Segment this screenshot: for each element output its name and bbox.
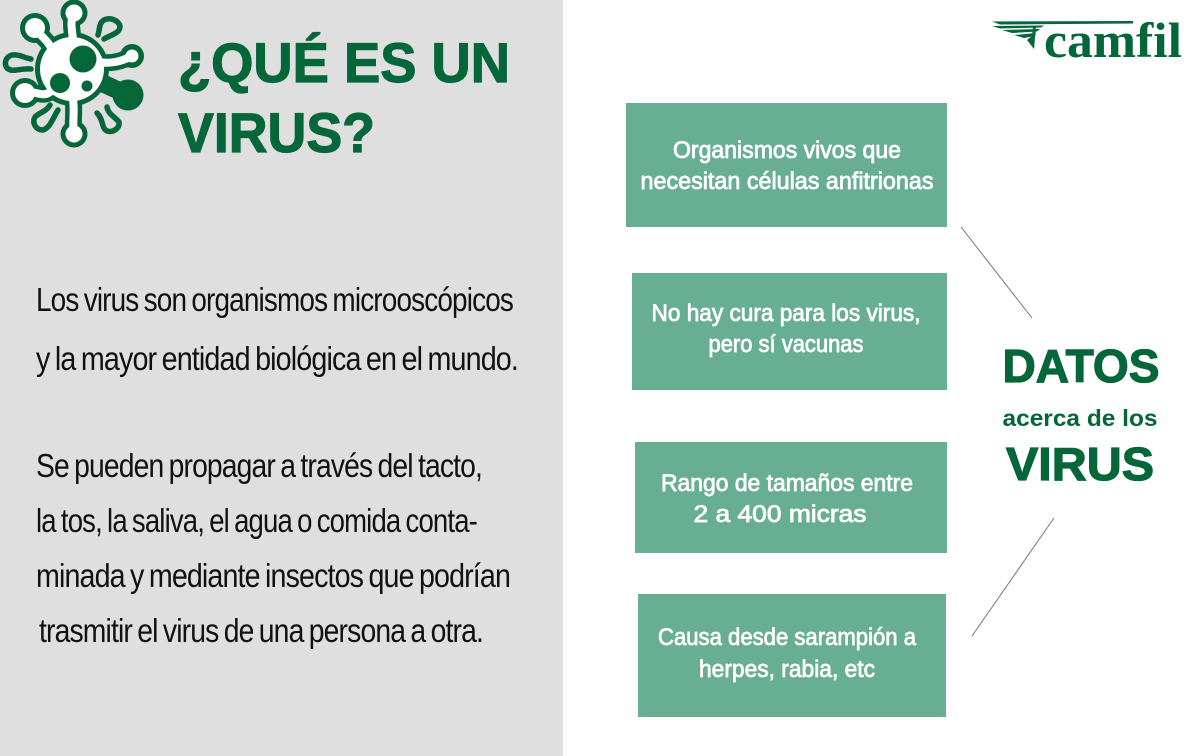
fact box 2: No hay cura para los virus, xyxy=(652,300,920,327)
fact box 2: pero sí vacunas xyxy=(708,331,864,358)
paragraph: what viruses are: y la mayor entidad biológica en el mundo. xyxy=(36,340,518,377)
paragraph: how viruses spread: Se pueden propagar a través del tacto, xyxy=(36,447,482,484)
side heading: datos acerca de los virus: DATOS xyxy=(1002,340,1160,392)
side heading: datos acerca de los virus: acerca de los xyxy=(1002,405,1158,431)
paragraph: how viruses spread: minada y mediante insectos que podrían xyxy=(36,557,510,594)
icon: logo wing xyxy=(992,21,1133,49)
logo: camfil xyxy=(992,12,1182,68)
paragraph: how viruses spread xyxy=(36,447,510,649)
title xyxy=(178,31,510,164)
side heading: datos acerca de los virus: VIRUS xyxy=(1006,438,1154,490)
connector line: upper xyxy=(961,227,1032,318)
title: ¿QUÉ ES UN xyxy=(178,31,510,94)
fact box 1: Organismos vivos que xyxy=(673,137,901,164)
paragraph: how viruses spread: la tos, la saliva, el agua o comida conta- xyxy=(36,502,477,539)
fact box 4: Causa desde sarampión a xyxy=(658,624,917,651)
title: VIRUS? xyxy=(178,101,375,164)
fact box 2 xyxy=(632,273,947,390)
icon: virus xyxy=(5,0,144,148)
fact box 4 xyxy=(638,594,946,717)
fact box 3 xyxy=(635,442,947,553)
connector line: lower xyxy=(972,518,1054,636)
fact box 3: 2 a 400 micras xyxy=(694,501,866,528)
fact box 1: necesitan células anfitrionas xyxy=(640,168,934,195)
left panel background xyxy=(0,0,563,756)
paragraph: what viruses are: Los virus son organismos microoscópicos xyxy=(36,281,513,318)
paragraph: what viruses are xyxy=(36,281,518,377)
fact box 1 xyxy=(626,103,947,227)
paragraph: how viruses spread: trasmitir el virus de una persona a otra. xyxy=(39,612,483,649)
logo wordmark: camfil xyxy=(1044,12,1182,68)
side heading: datos acerca de los virus xyxy=(1002,340,1160,490)
fact box 3: Rango de tamaños entre xyxy=(661,470,913,497)
fact box 4: herpes, rabia, etc xyxy=(699,656,875,683)
